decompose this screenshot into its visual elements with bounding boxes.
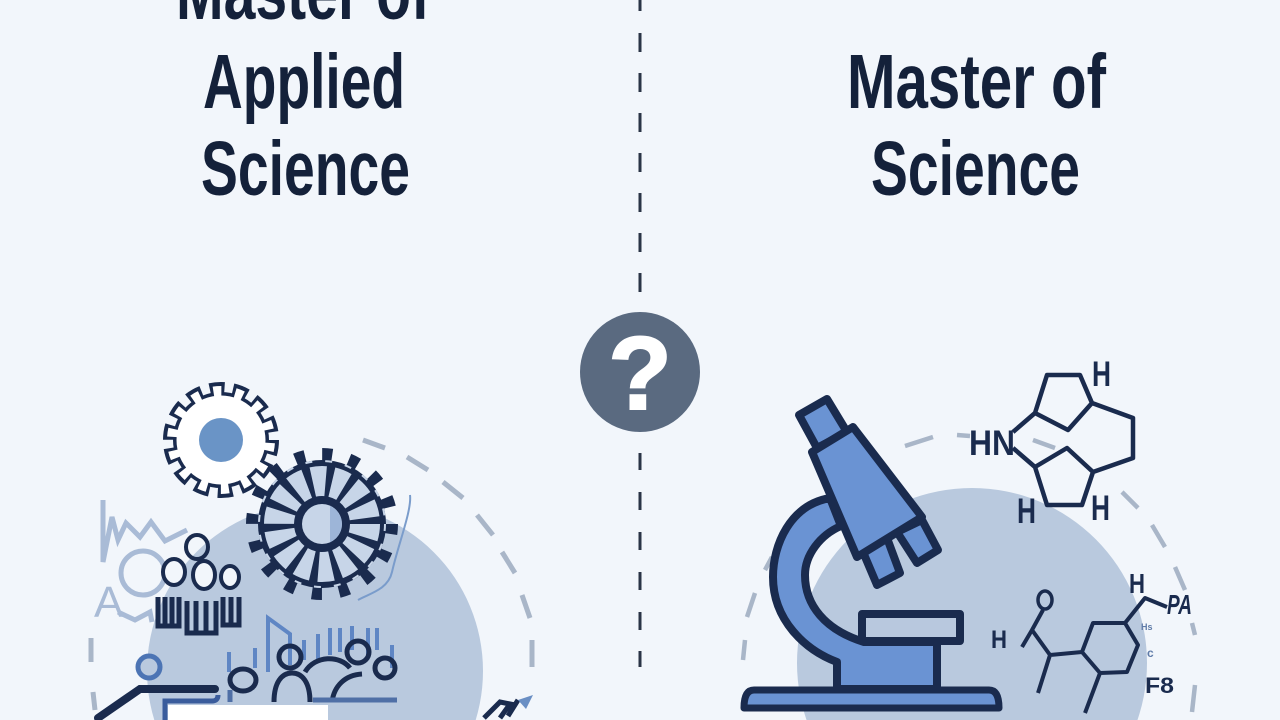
icon: small gear [172, 391, 270, 489]
molecule: upper: H [1092, 355, 1111, 394]
icon: pencil scribble [484, 695, 533, 718]
sketch: faded chart and letter: A [94, 578, 124, 627]
heading: Master of Science: Master of [847, 39, 1106, 125]
icon: large spoked gear [253, 455, 410, 600]
illustration: science [743, 355, 1195, 720]
base [744, 690, 999, 708]
molecule: lower [991, 568, 1192, 713]
center dashed divider [638, 0, 642, 667]
heading: Master of Science: Science [871, 126, 1080, 212]
sketch: faded chart and letter [94, 500, 187, 627]
heading: Master of Applied Science: Applied [203, 39, 405, 125]
molecule: upper: H [1017, 492, 1036, 531]
molecule: upper [969, 355, 1133, 531]
molecule: upper: H [1091, 489, 1110, 528]
icon: presenter at board [98, 656, 328, 720]
bar chart with audience [229, 618, 397, 702]
molecule: lower: PA [1167, 589, 1192, 620]
heading: Master of Science [847, 39, 1106, 212]
molecule: lower: Hs [1141, 622, 1153, 632]
body tube [812, 427, 922, 557]
right objective [897, 520, 938, 563]
molecule: lower: c [1147, 646, 1154, 660]
molecule: upper: HN [969, 424, 1015, 463]
molecule: lower: H [991, 626, 1007, 654]
stage [862, 614, 960, 641]
backdrop circle and dashed arc [91, 440, 532, 720]
icon: people group [158, 535, 239, 633]
arm and pillar [773, 498, 937, 689]
molecule: lower: F8 [1145, 673, 1174, 698]
backdrop circle and dashed arc [743, 435, 1195, 720]
molecule: lower: H [1129, 568, 1145, 599]
icon: question mark badge [580, 312, 700, 432]
icon: microscope [744, 399, 999, 708]
illustration: applied science [91, 391, 533, 720]
objective lenses [863, 538, 900, 585]
icon: question mark badge: ? [608, 316, 672, 432]
eyepiece [799, 399, 847, 448]
heading: Master of Applied Science: Science [201, 126, 410, 212]
audience figures [230, 641, 397, 702]
heading: Master of Applied Science [176, 0, 430, 212]
